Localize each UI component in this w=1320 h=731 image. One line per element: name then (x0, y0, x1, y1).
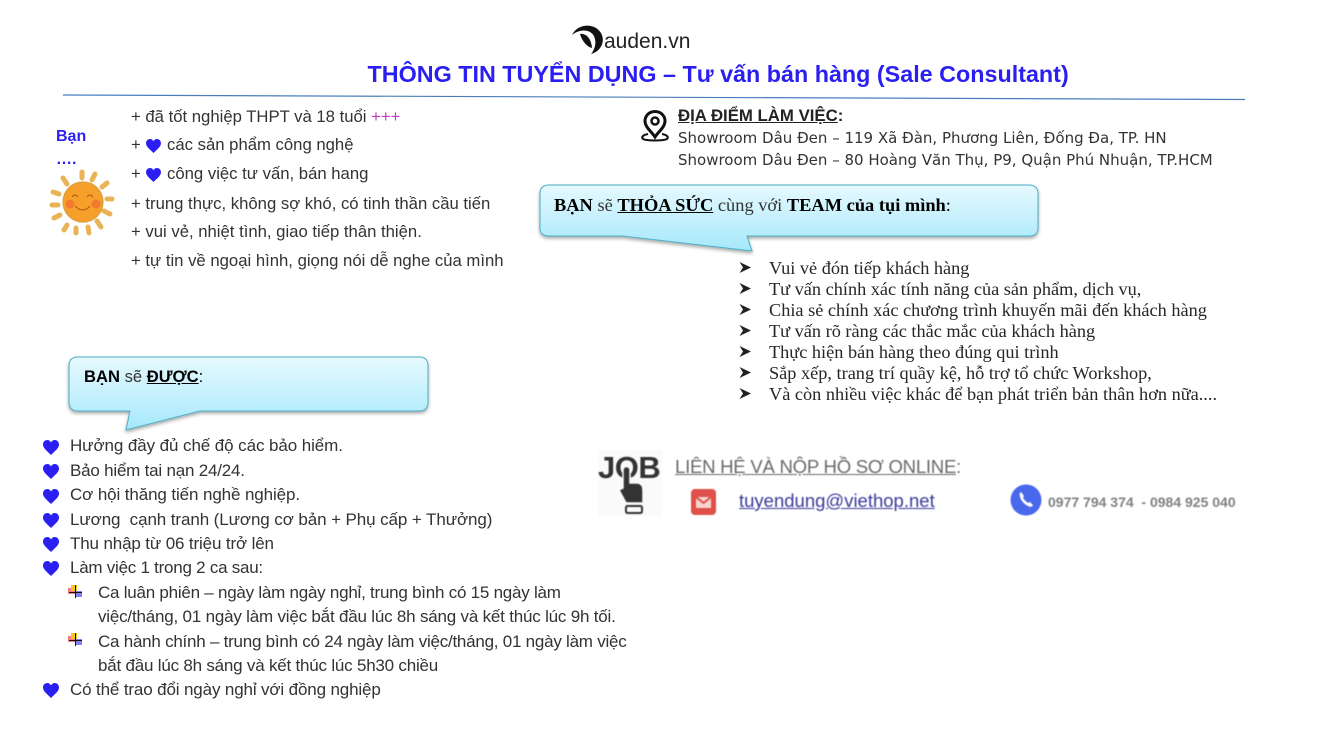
icon: job hand (598, 450, 662, 516)
icon: job hand: JOB (598, 450, 660, 485)
callout: Bạn sẽ được: BẠN sẽ ĐƯỢC: (84, 366, 203, 386)
address lines: Showroom Dâu Đen – 119 Xã Đàn, Phương Liên, Đống Đa, TP. HN (678, 129, 1167, 147)
benefits list: bắt đầu lúc 8h sáng và kết thúc lúc 5h30 chiều (98, 656, 438, 675)
benefits list: Có thể trao đổi ngày nghỉ với đồng nghiệp (70, 680, 381, 699)
address lines: Showroom Dâu Đen – 80 Hoàng Văn Thụ, P9, Quận Phú Nhuận, TP.HCM (678, 151, 1213, 169)
heading: location: ĐỊA ĐIỂM LÀM VIỆC: (678, 106, 843, 124)
icon: mail (690, 488, 717, 516)
task list: Sắp xếp, trang trí quầy kệ, hỗ trợ tổ chức Workshop, (769, 363, 1152, 383)
phone numbers: 0977 794 374 - 0984 925 040 (1048, 494, 1236, 510)
benefits list: Ca hành chính – trung bình có 24 ngày làm việc/tháng, 01 ngày làm việc (98, 632, 626, 651)
heading: Bạn (56, 128, 86, 168)
benefits list: Làm việc 1 trong 2 ca sau: (70, 558, 263, 577)
panel: Bạn requirements (50, 106, 504, 270)
requirements list: + vui vẻ, nhiệt tình, giao tiếp thân thiện. (131, 222, 422, 240)
icon: location pin (641, 110, 669, 142)
benefits list: Ca luân phiên – ngày làm ngày nghỉ, trung bình có 15 ngày làm (98, 583, 561, 602)
task list: Vui vẻ đón tiếp khách hàng (769, 258, 969, 278)
benefits list: Thu nhập từ 06 triệu trở lên (70, 534, 274, 553)
task list: Thực hiện bán hàng theo đúng qui trình (769, 342, 1059, 362)
icon: sun (50, 170, 114, 236)
heading: Bạn: Bạn (56, 128, 86, 144)
task list: Tư vấn rõ ràng các thắc mắc của khách hàng (769, 321, 1095, 341)
task list: Tư vấn chính xác tính năng của sản phẩm, dịch vụ, (769, 279, 1141, 299)
icon: phone (1010, 484, 1042, 516)
panel: work location (641, 106, 1213, 169)
benefits list: Bảo hiểm tai nạn 24/24. (70, 461, 245, 480)
benefits list (43, 436, 626, 699)
heading: Bạn: …. (56, 150, 76, 168)
benefits list: Lương cạnh tranh (Lương cơ bản + Phụ cấp + Thưởng) (70, 510, 492, 529)
callout: Bạn sẽ được (66, 356, 431, 434)
requirements list: + công việc tư vấn, bán hang (131, 164, 368, 183)
email: tuyendung@viethop.net (739, 490, 935, 511)
contact heading: LIÊN HỆ VÀ NỘP HỒ SƠ ONLINE: (675, 456, 961, 477)
task list: Và còn nhiều việc khác để bạn phát triển bản thân hơn nữa.... (769, 384, 1217, 404)
address lines (678, 129, 1213, 169)
requirements list: + trung thực, không sợ khó, có tinh thần cầu tiến (131, 194, 490, 212)
title: THÔNG TIN TUYỂN DỤNG – Tư vấn bán hàng (Sale Consultant) (368, 61, 1069, 87)
benefits list: Hưởng đầy đủ chế độ các bảo hiểm. (70, 436, 343, 455)
callout: Bạn sẽ thỏa sức (537, 184, 1041, 256)
benefits list: việc/tháng, 01 ngày làm việc bắt đầu lúc 8h sáng và kết thúc lúc 9h tối. (98, 607, 616, 626)
title divider (63, 94, 1245, 100)
logo: auden.vn (572, 26, 690, 54)
task list: Chia sẻ chính xác chương trình khuyến mãi đến khách hàng (769, 300, 1207, 320)
panel: contact (598, 450, 1236, 516)
logo: auden.vn: auden.vn (604, 30, 690, 53)
benefits list: Cơ hội thăng tiến nghề nghiệp. (70, 485, 300, 504)
task list (740, 258, 1217, 404)
requirements list (131, 106, 504, 270)
requirements list: + các sản phẩm công nghệ (131, 135, 354, 154)
requirements list: + đã tốt nghiệp THPT và 18 tuổi +++ (131, 106, 400, 126)
callout: Bạn sẽ thỏa sức: BẠN sẽ THỎA SỨC cùng với TEAM của tụi mình: (554, 195, 951, 215)
requirements list: + tự tin về ngoại hình, giọng nói dễ nghe của mình (131, 250, 504, 270)
